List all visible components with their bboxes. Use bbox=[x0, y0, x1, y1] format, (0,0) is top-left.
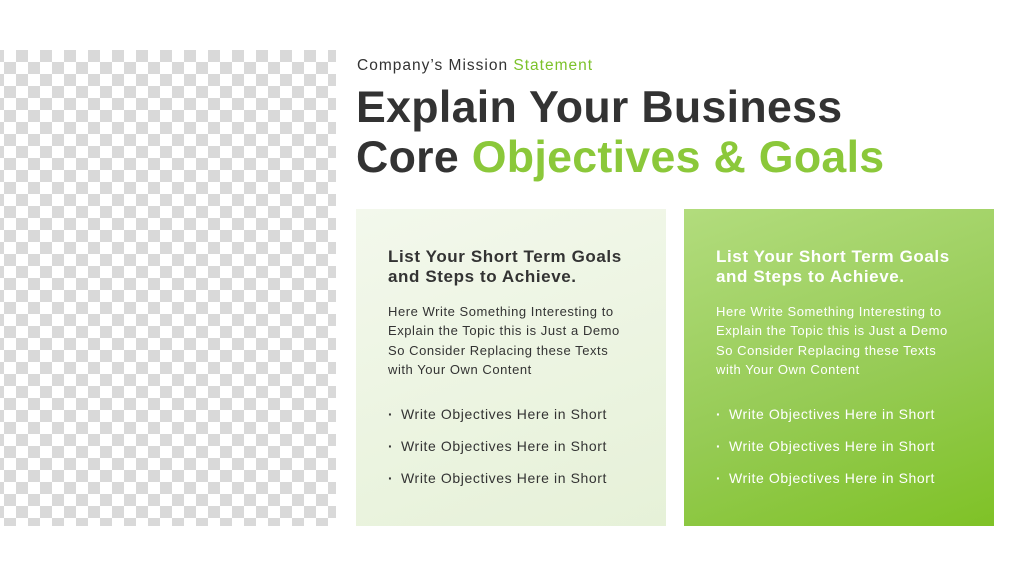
card text: with Your Own Content bbox=[716, 362, 860, 377]
card text: with Your Own Content bbox=[388, 362, 532, 377]
objectives list: Write Objectives Here in Short bbox=[401, 438, 607, 454]
card text: Explain the Topic this is Just a Demo bbox=[388, 323, 620, 338]
card text: Here Write Something Interesting to bbox=[716, 304, 942, 319]
panel: light card bbox=[356, 209, 666, 526]
card text: Explain the Topic this is Just a Demo bbox=[716, 323, 948, 338]
card heading: and Steps to Achieve. bbox=[716, 267, 905, 286]
card heading: List Your Short Term Goals bbox=[388, 247, 622, 266]
objectives list: Write Objectives Here in Short bbox=[401, 406, 607, 422]
objectives list: Write Objectives Here in Short bbox=[729, 438, 935, 454]
objectives list bbox=[388, 406, 607, 486]
card text bbox=[716, 304, 948, 377]
title bbox=[356, 83, 884, 182]
card heading: List Your Short Term Goals bbox=[716, 247, 950, 266]
card text: Here Write Something Interesting to bbox=[388, 304, 614, 319]
title: Explain Your Business bbox=[356, 83, 842, 132]
card text: So Consider Replacing these Texts bbox=[388, 343, 608, 358]
card text: So Consider Replacing these Texts bbox=[716, 343, 936, 358]
objectives list bbox=[716, 406, 935, 486]
panel: green card bbox=[684, 209, 994, 526]
objectives list: Write Objectives Here in Short bbox=[401, 470, 607, 486]
objectives list: Write Objectives Here in Short bbox=[729, 406, 935, 422]
title: Core Objectives & Goals bbox=[356, 133, 884, 182]
placeholder image area bbox=[0, 50, 336, 526]
card text bbox=[388, 304, 620, 377]
card heading bbox=[388, 247, 622, 286]
card heading: and Steps to Achieve. bbox=[388, 267, 577, 286]
card heading bbox=[716, 247, 950, 286]
objectives list: Write Objectives Here in Short bbox=[729, 470, 935, 486]
subtitle: Company’s Mission Statement bbox=[357, 57, 593, 74]
